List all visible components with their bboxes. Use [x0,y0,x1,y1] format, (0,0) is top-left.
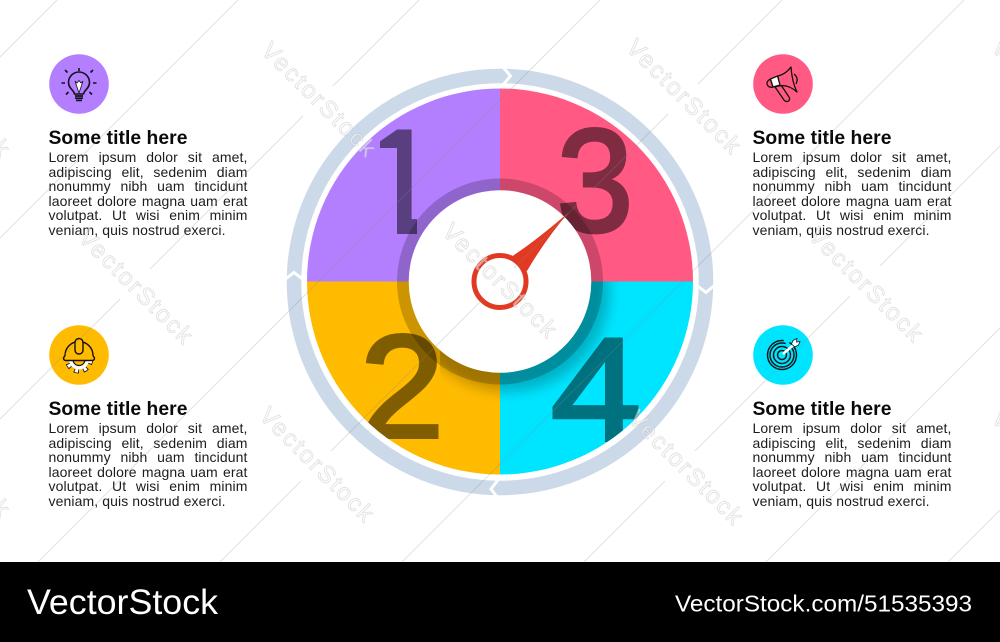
number 2: 2 [360,305,444,468]
number 4: 4 [551,308,641,471]
heading 3: Some title here [752,128,891,149]
watermark overlay: VectorStock [73,224,199,350]
text block 3: veniam, quis nostrud exerci. [752,222,930,238]
text block 4: veniam, quis nostrud exerci. [752,493,930,509]
quadrant 3 pink [500,88,693,282]
text block 1: Lorem ipsum dolor sit amet, [48,149,248,165]
footer logo: VectorStock [27,582,218,622]
needle [474,212,569,308]
text block 4: nonummy nibh uam tincidunt [752,449,952,465]
panel: block 4 [752,399,952,509]
text block 2: veniam, quis nostrud exerci. [48,493,226,509]
text block 2: nonummy nibh uam tincidunt [48,449,248,465]
text block 1 [48,149,248,238]
watermark overlay: VectorStock [256,37,382,163]
text block 4: adipiscing elit, sedenim diam [752,435,952,451]
quadrant 4 cyan [500,282,693,474]
panel: block 2 [48,399,248,509]
pie quadrants [307,88,693,474]
icon: light bulb [49,54,109,114]
arrow ring [284,66,716,498]
text block 3: laoreet dolore magna uam erat [752,193,952,209]
text block 2: volutpat. Ut wisi enim minim [48,478,248,494]
text block 1: nonummy nibh uam tincidunt [48,178,248,194]
text block 3: nonummy nibh uam tincidunt [752,178,952,194]
heading 1: Some title here [48,128,187,149]
icon: megaphone [753,54,813,114]
text block 4: volutpat. Ut wisi enim minim [752,478,952,494]
watermark overlay: VectorStock [254,402,380,528]
heading 2: Some title here [48,399,187,420]
text block 2: laoreet dolore magna uam erat [48,464,248,480]
panel: block 1 [48,128,248,238]
panel: block 3 [752,128,952,238]
text block 3: volutpat. Ut wisi enim minim [752,207,952,223]
icon: hard hat and gear [49,325,109,385]
watermark overlay: VectorStock [623,405,749,531]
number 1: 1 [360,100,441,263]
watermark overlay: VectorStock [437,218,563,344]
footer url: VectorStock.com/51535393 [675,590,972,616]
text block 4: Lorem ipsum dolor sit amet, [752,420,952,436]
inner dark ring [397,178,603,384]
watermark overlay: VectorStock [803,222,929,348]
big numbers [366,127,638,442]
text block 1: adipiscing elit, sedenim diam [48,164,248,180]
text block 3: adipiscing elit, sedenim diam [752,164,952,180]
text block 2: Lorem ipsum dolor sit amet, [48,420,248,436]
quadrant 1 purple [307,88,500,282]
text block 4: laoreet dolore magna uam erat [752,464,952,480]
text block 4 [752,420,952,509]
inner ring shadow [440,282,616,398]
white centre disc [409,190,591,373]
text block 2 [48,420,248,509]
number 3: 3 [557,99,633,262]
text block 1: veniam, quis nostrud exerci. [48,222,226,238]
quadrant 2 orange [307,282,500,474]
text block 1: laoreet dolore magna uam erat [48,193,248,209]
text block 2: adipiscing elit, sedenim diam [48,435,248,451]
heading 4: Some title here [752,399,891,420]
icon: target with dart [753,325,813,385]
text block 3: Lorem ipsum dolor sit amet, [752,149,952,165]
text block 3 [752,149,952,238]
watermark overlay: VectorStock [621,34,747,160]
circular diagram [286,68,714,496]
text block 1: volutpat. Ut wisi enim minim [48,207,248,223]
